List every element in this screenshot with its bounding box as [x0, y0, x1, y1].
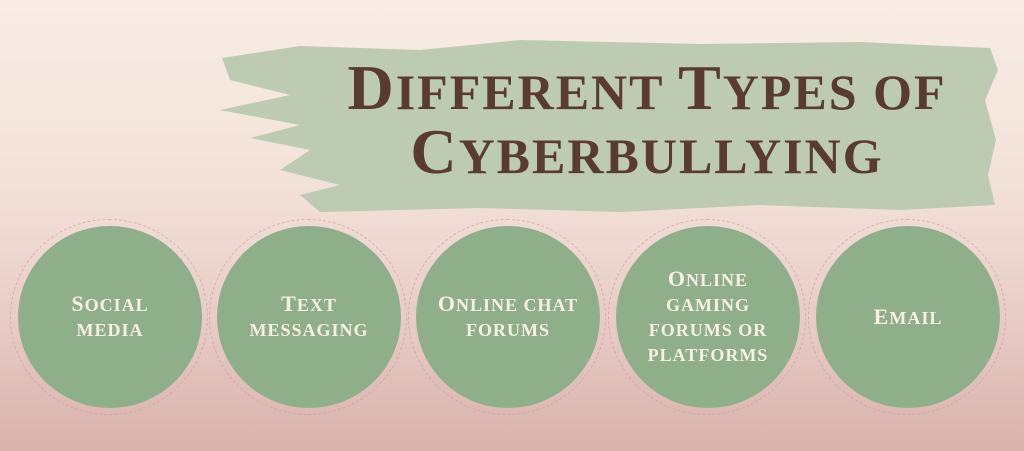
circle: text messaging	[217, 226, 401, 408]
circle: online gaming	[616, 226, 800, 408]
circle: social media: SOCIAL	[71, 291, 149, 316]
circle: online gaming: ONLINE	[668, 266, 748, 291]
ring: decorative outlines	[10, 219, 1006, 415]
circle: social media	[18, 226, 202, 408]
circle: text messaging: TEXT	[281, 291, 337, 316]
circle: email	[816, 226, 1000, 408]
circle: social media: MEDIA	[76, 320, 143, 340]
circle: online chat forums: ONLINE CHAT	[438, 291, 578, 316]
circle: text messaging: MESSAGING	[249, 320, 369, 340]
circle: online gaming: FORUMS OR	[649, 320, 767, 340]
circle: email: EMAIL	[874, 304, 942, 328]
circle: online gaming: GAMING	[666, 295, 750, 315]
circle: online gaming: PLATFORMS	[648, 345, 768, 365]
title	[347, 52, 947, 187]
title: CYBERBULLYING	[410, 116, 884, 187]
title: DIFFERENT TYPES OF	[347, 52, 947, 123]
circle: online chat forums: FORUMS	[466, 320, 550, 340]
circle: online chat forums	[416, 226, 600, 408]
